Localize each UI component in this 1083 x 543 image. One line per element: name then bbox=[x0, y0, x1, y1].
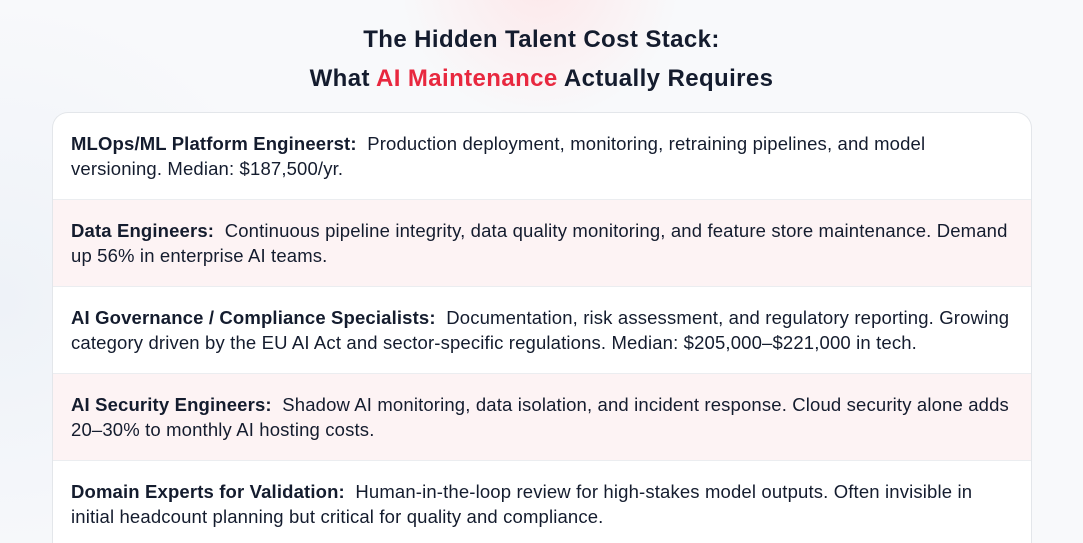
row: governance specialists bbox=[53, 286, 1031, 373]
row: data engineers: up 56% in enterprise AI teams. bbox=[71, 245, 327, 266]
row: data engineers bbox=[53, 199, 1031, 286]
row: domain experts: initial headcount planning but critical for quality and compliance. bbox=[71, 506, 603, 527]
title: The Hidden Talent Cost Stack: bbox=[363, 26, 720, 53]
title: What AI Maintenance Actually Requires bbox=[310, 65, 773, 92]
row: security engineers bbox=[53, 373, 1031, 460]
row: security engineers: AI Security Engineers: Shadow AI monitoring, data isolation, and incident response. Cloud security alone adds bbox=[71, 394, 1009, 415]
row: MLOps engineers: versioning. Median: $187,500/yr. bbox=[71, 158, 343, 179]
row: MLOps engineers: MLOps/ML Platform Engineerst: Production deployment, monitoring, retraining pipelines, and model bbox=[71, 133, 925, 154]
row: domain experts bbox=[53, 460, 1031, 543]
panel: role cost stack bbox=[52, 112, 1032, 543]
row: MLOps engineers bbox=[71, 133, 925, 179]
row: security engineers: 20–30% to monthly AI hosting costs. bbox=[71, 419, 374, 440]
row: governance specialists: AI Governance / Compliance Specialists: Documentation, risk assessment, and regulatory reporting. Growing bbox=[71, 307, 1009, 328]
row: governance specialists: category driven by the EU AI Act and sector-specific regulations. Median: $205,000–$221,000 in tech. bbox=[71, 332, 917, 353]
row: domain experts: Domain Experts for Validation: Human-in-the-loop review for high-stakes model outputs. Often invisible in bbox=[71, 481, 972, 502]
title bbox=[310, 26, 773, 92]
row: data engineers: Data Engineers: Continuous pipeline integrity, data quality monitoring, and feature store maintenance. Demand bbox=[71, 220, 1008, 241]
